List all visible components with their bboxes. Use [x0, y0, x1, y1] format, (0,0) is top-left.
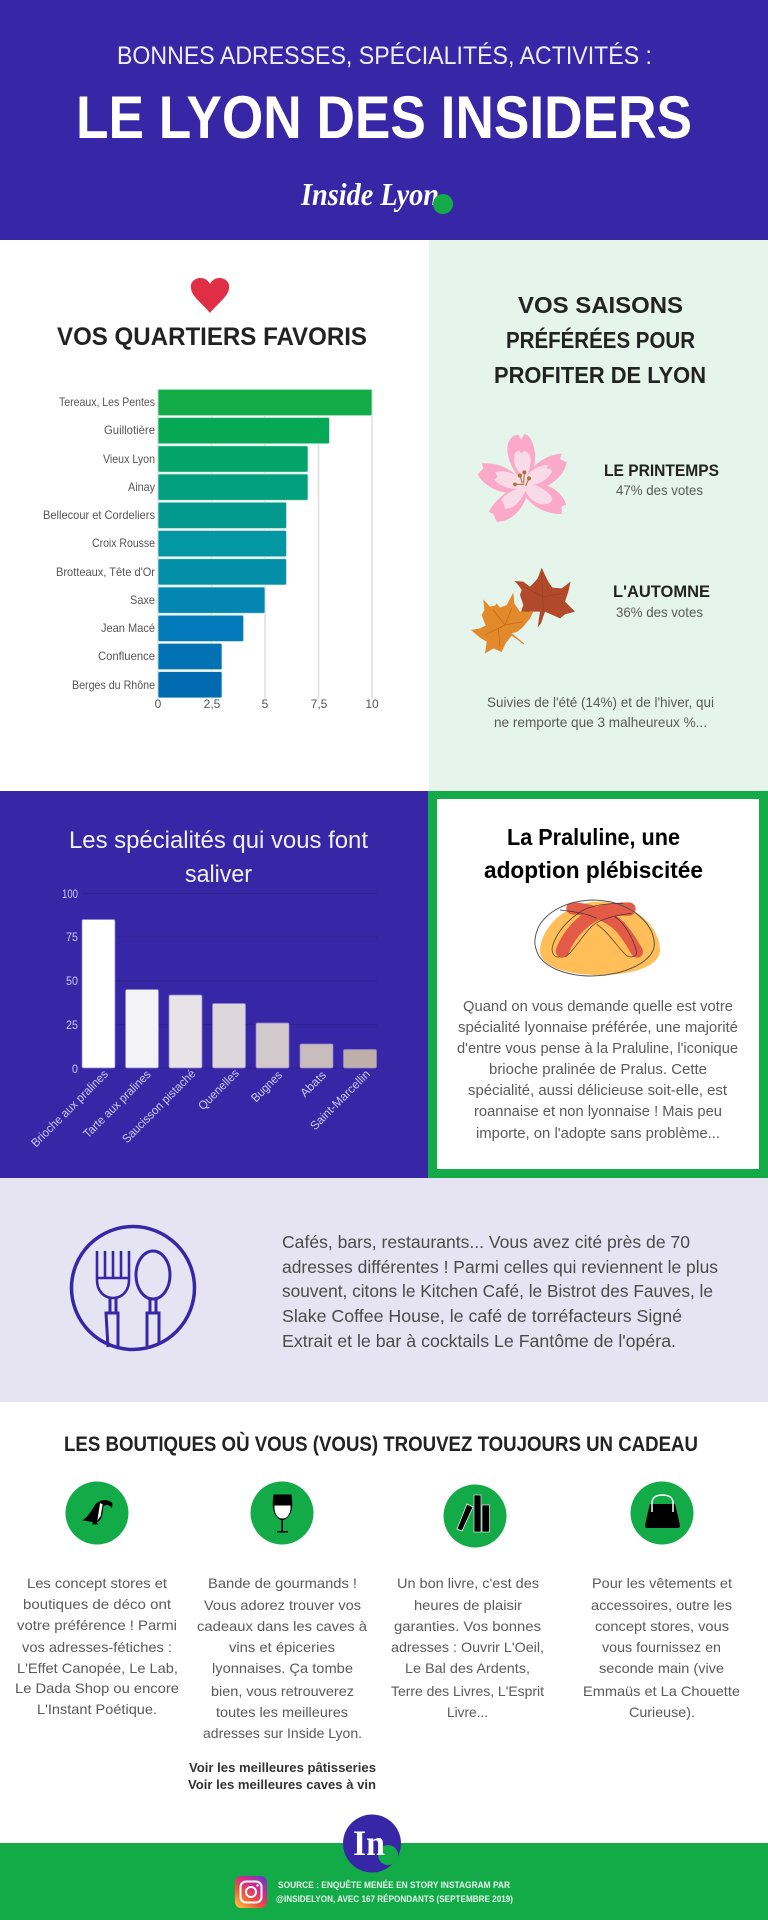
- text: praluline paragraph: d'entre vous pense à la Praluline, l'iconique: [457, 1041, 738, 1057]
- text: gourmands: bien, vous retrouverez: [211, 1683, 354, 1699]
- bar chart: quartiers: Ainay: [128, 480, 155, 494]
- bar chart: quartiers: Saxe: [130, 593, 155, 607]
- icon: books: [444, 1484, 506, 1548]
- text: gourmands: cadeaux dans les caves à: [197, 1618, 367, 1634]
- logo: Inside Lyon: Inside Lyon: [300, 176, 439, 212]
- text: vêtements: seconde main (vive: [599, 1660, 724, 1676]
- bar chart: spécialités: [28, 887, 377, 1150]
- bar chart: quartiers: 0: [155, 697, 162, 711]
- icon: instagram: [235, 1876, 267, 1908]
- bar chart: spécialités: Tarte aux pralines: [80, 1067, 154, 1141]
- panel: header: [0, 0, 768, 240]
- text: l'automne: [613, 582, 710, 620]
- bar chart: spécialités: Quenelles: [195, 1066, 242, 1113]
- text: livres: heures de plaisir: [414, 1597, 522, 1613]
- text: concept stores: votre préférence ! Parmi: [17, 1617, 177, 1633]
- heading: vos saisons: [494, 292, 706, 388]
- text: praluline paragraph: [457, 999, 738, 1142]
- panel: cafés bars restaurants: [0, 1178, 768, 1402]
- bar chart: quartiers: Vieux Lyon: [103, 452, 155, 466]
- bar chart: spécialités: Abats: [297, 1068, 329, 1100]
- panel: footer: [0, 1814, 768, 1920]
- bar chart: quartiers: Brotteaux, Tête d'Or: [56, 565, 155, 579]
- icon: autumn leaves: [471, 568, 575, 654]
- bar chart: quartiers: 2,5: [204, 697, 221, 711]
- bar chart: spécialités: Brioche aux pralines: [28, 1067, 111, 1150]
- links: meilleures adresses: Voir les meilleures pâtisseries: [189, 1760, 376, 1775]
- text: praluline paragraph: spécialité lyonnaise préférée, une majorité: [458, 1020, 738, 1036]
- bar chart: quartiers: 10: [365, 697, 379, 711]
- text: vêtements: vous fournissez en: [602, 1639, 721, 1655]
- bar chart: quartiers: Confluence: [98, 649, 155, 663]
- heading: vos quartiers favoris: VOS QUARTIERS FAVORIS: [57, 323, 367, 351]
- heading: spécialités: saliver: [185, 861, 252, 888]
- text: concept stores: Le Dada Shop ou encore: [15, 1680, 179, 1696]
- text: le printemps: [604, 461, 719, 498]
- text: concept stores: L'Effet Canopée, Le Lab,: [17, 1660, 178, 1676]
- text: gourmands: Bande de gourmands !: [208, 1575, 357, 1591]
- icon: heart: [191, 278, 229, 313]
- text: vêtements: Pour les vêtements et: [592, 1575, 732, 1591]
- bar chart: spécialités: 0: [72, 1062, 78, 1076]
- text: vêtements: [583, 1575, 740, 1720]
- text: suivies de l'été: ne remporte que 3 malheureux %...: [494, 714, 707, 730]
- text: concept stores: vos adresses-fétiches :: [22, 1639, 172, 1655]
- text: l'automne: 36% des votes: [616, 604, 703, 620]
- panel: spécialités: [0, 791, 428, 1178]
- text: livres: Un bon livre, c'est des: [397, 1575, 539, 1591]
- heading: la praluline: [484, 824, 703, 883]
- text: suivies de l'été: [487, 694, 714, 730]
- bar chart: spécialités: Saint-Marcellin: [307, 1067, 373, 1133]
- text: praluline paragraph: roannaise et non lyonnaise ! Mais peu: [474, 1104, 722, 1120]
- panel: vos quartiers favoris: [0, 240, 429, 791]
- heading: la praluline: adoption plébiscitée: [484, 857, 703, 883]
- text: gourmands: toutes les meilleures: [216, 1704, 348, 1720]
- heading: la praluline: La Praluline, une: [507, 824, 680, 850]
- text: gourmands: Vous adorez trouver vos: [204, 1597, 361, 1613]
- bar chart: spécialités: 25: [66, 1018, 78, 1032]
- text: gourmands: adresses sur Inside Lyon.: [203, 1725, 362, 1741]
- icon: praluline brioche: [535, 900, 660, 976]
- text: vêtements: Emmaüs et La Chouette: [583, 1683, 740, 1699]
- text: cafés paragraph: Cafés, bars, restaurants... Vous avez cité près de 70: [282, 1232, 690, 1252]
- text: cafés paragraph: [282, 1232, 718, 1351]
- bar chart: spécialités: Bugnes: [248, 1068, 285, 1105]
- logo: In: [343, 1814, 401, 1872]
- text: concept stores: Les concept stores et: [27, 1575, 167, 1591]
- text: source: SOURCE : ENQUÊTE MENÉE EN STORY INSTAGRAM PAR: [278, 1879, 510, 1890]
- text: gourmands: [197, 1575, 367, 1741]
- heading: spécialités: [69, 827, 368, 888]
- links: meilleures adresses: Voir les meilleures caves à vin: [188, 1777, 376, 1792]
- bar chart: quartiers: Berges du Rhône: [72, 678, 155, 692]
- logo: In: In: [353, 1823, 385, 1863]
- bar chart: spécialités: 100: [62, 887, 78, 901]
- text: vêtements: accessoires, outre les: [591, 1597, 732, 1613]
- text: suivies de l'été: Suivies de l'été (14%) et de l'hiver, qui: [487, 694, 714, 710]
- bar chart: spécialités: Saucisson pistaché: [119, 1066, 199, 1146]
- text: livres: adresses : Ouvrir L'Oeil,: [391, 1639, 544, 1655]
- text: livres: garanties. Vos bonnes: [394, 1618, 541, 1634]
- icon: toucan: [66, 1482, 128, 1544]
- text: praluline paragraph: brioche pralinée de Pralus. Cette: [489, 1062, 707, 1078]
- text: l'automne: L'AUTOMNE: [613, 582, 710, 601]
- bar chart: quartiers: 5: [262, 697, 269, 711]
- text: cafés paragraph: Extrait et le bar à cocktails Le Fantôme de l'opéra.: [282, 1331, 676, 1351]
- text: cafés paragraph: Slake Coffee House, le café de torréfacteurs Signé: [282, 1306, 682, 1326]
- text: gourmands: lyonnaises. Ça tombe: [212, 1660, 353, 1676]
- text: concept stores: [15, 1575, 179, 1717]
- heading: vos saisons: PRÉFÉRÉES POUR: [506, 326, 695, 353]
- text: livres: Terre des Livres, L'Esprit: [391, 1683, 544, 1699]
- bar chart: quartiers: 7,5: [311, 697, 328, 711]
- text: le printemps: LE PRINTEMPS: [604, 461, 719, 480]
- subtitle: BONNES ADRESSES, SPÉCIALITÉS, ACTIVITÉS :: [117, 41, 652, 70]
- bar chart: quartiers: Bellecour et Cordeliers: [43, 508, 155, 522]
- text: cafés paragraph: adresses différentes ! Parmi celles qui reviennent le plus: [282, 1257, 718, 1277]
- text: concept stores: boutiques de déco ont: [23, 1596, 171, 1612]
- bar chart: spécialités: 50: [66, 974, 78, 988]
- bar chart: quartiers: Jean Macé: [101, 621, 155, 635]
- text: gourmands: vins et épiceries: [229, 1639, 335, 1655]
- bar chart: spécialités: 75: [66, 930, 78, 944]
- panel: vos saisons: [429, 240, 768, 791]
- heading: vos saisons: PROFITER DE LYON: [494, 362, 706, 388]
- text: vêtements: Curieuse).: [629, 1704, 695, 1720]
- icon: handbag: [630, 1482, 694, 1544]
- text: source: [276, 1879, 513, 1904]
- links: meilleures adresses: [188, 1760, 376, 1792]
- text: praluline paragraph: importe, on l'adopte sans problème...: [476, 1126, 720, 1142]
- heading: boutiques: LES BOUTIQUES OÙ VOUS (VOUS) TROUVEZ TOUJOURS UN CADEAU: [64, 1432, 698, 1456]
- icon: wine glass: [250, 1482, 314, 1544]
- heading: spécialités: Les spécialités qui vous font: [69, 827, 368, 854]
- title: LE LYON DES INSIDERS: [76, 84, 692, 151]
- text: livres: Le Bal des Ardents,: [405, 1660, 530, 1676]
- icon: fork and spoon: [72, 1226, 194, 1350]
- bar chart: quartiers: Croix Rousse: [92, 536, 155, 550]
- text: praluline paragraph: Quand on vous demande quelle est votre: [463, 999, 733, 1015]
- text: le printemps: 47% des votes: [616, 482, 703, 498]
- text: vêtements: concept stores, vous: [595, 1618, 729, 1634]
- icon: cherry blossom: [478, 434, 567, 522]
- text: livres: [391, 1575, 544, 1720]
- text: livres: Livre...: [447, 1704, 488, 1720]
- panel: la praluline: [428, 791, 768, 1178]
- bar chart: quartiers: Guillotière: [104, 423, 155, 437]
- bar chart: quartiers: Tereaux, Les Pentes: [59, 395, 155, 409]
- bar chart: quartiers: [43, 389, 379, 711]
- heading: vos saisons: VOS SAISONS: [518, 292, 683, 318]
- text: concept stores: L'Instant Poétique.: [37, 1701, 157, 1717]
- text: source: @INSIDELYON, AVEC 167 RÉPONDANTS (SEPTEMBRE 2019): [276, 1894, 513, 1904]
- text: cafés paragraph: souvent, citons le Kitchen Café, le Bistrot des Fauves, le: [282, 1281, 713, 1301]
- text: praluline paragraph: spécialité, aussi délicieuse soit-elle, est: [468, 1083, 727, 1099]
